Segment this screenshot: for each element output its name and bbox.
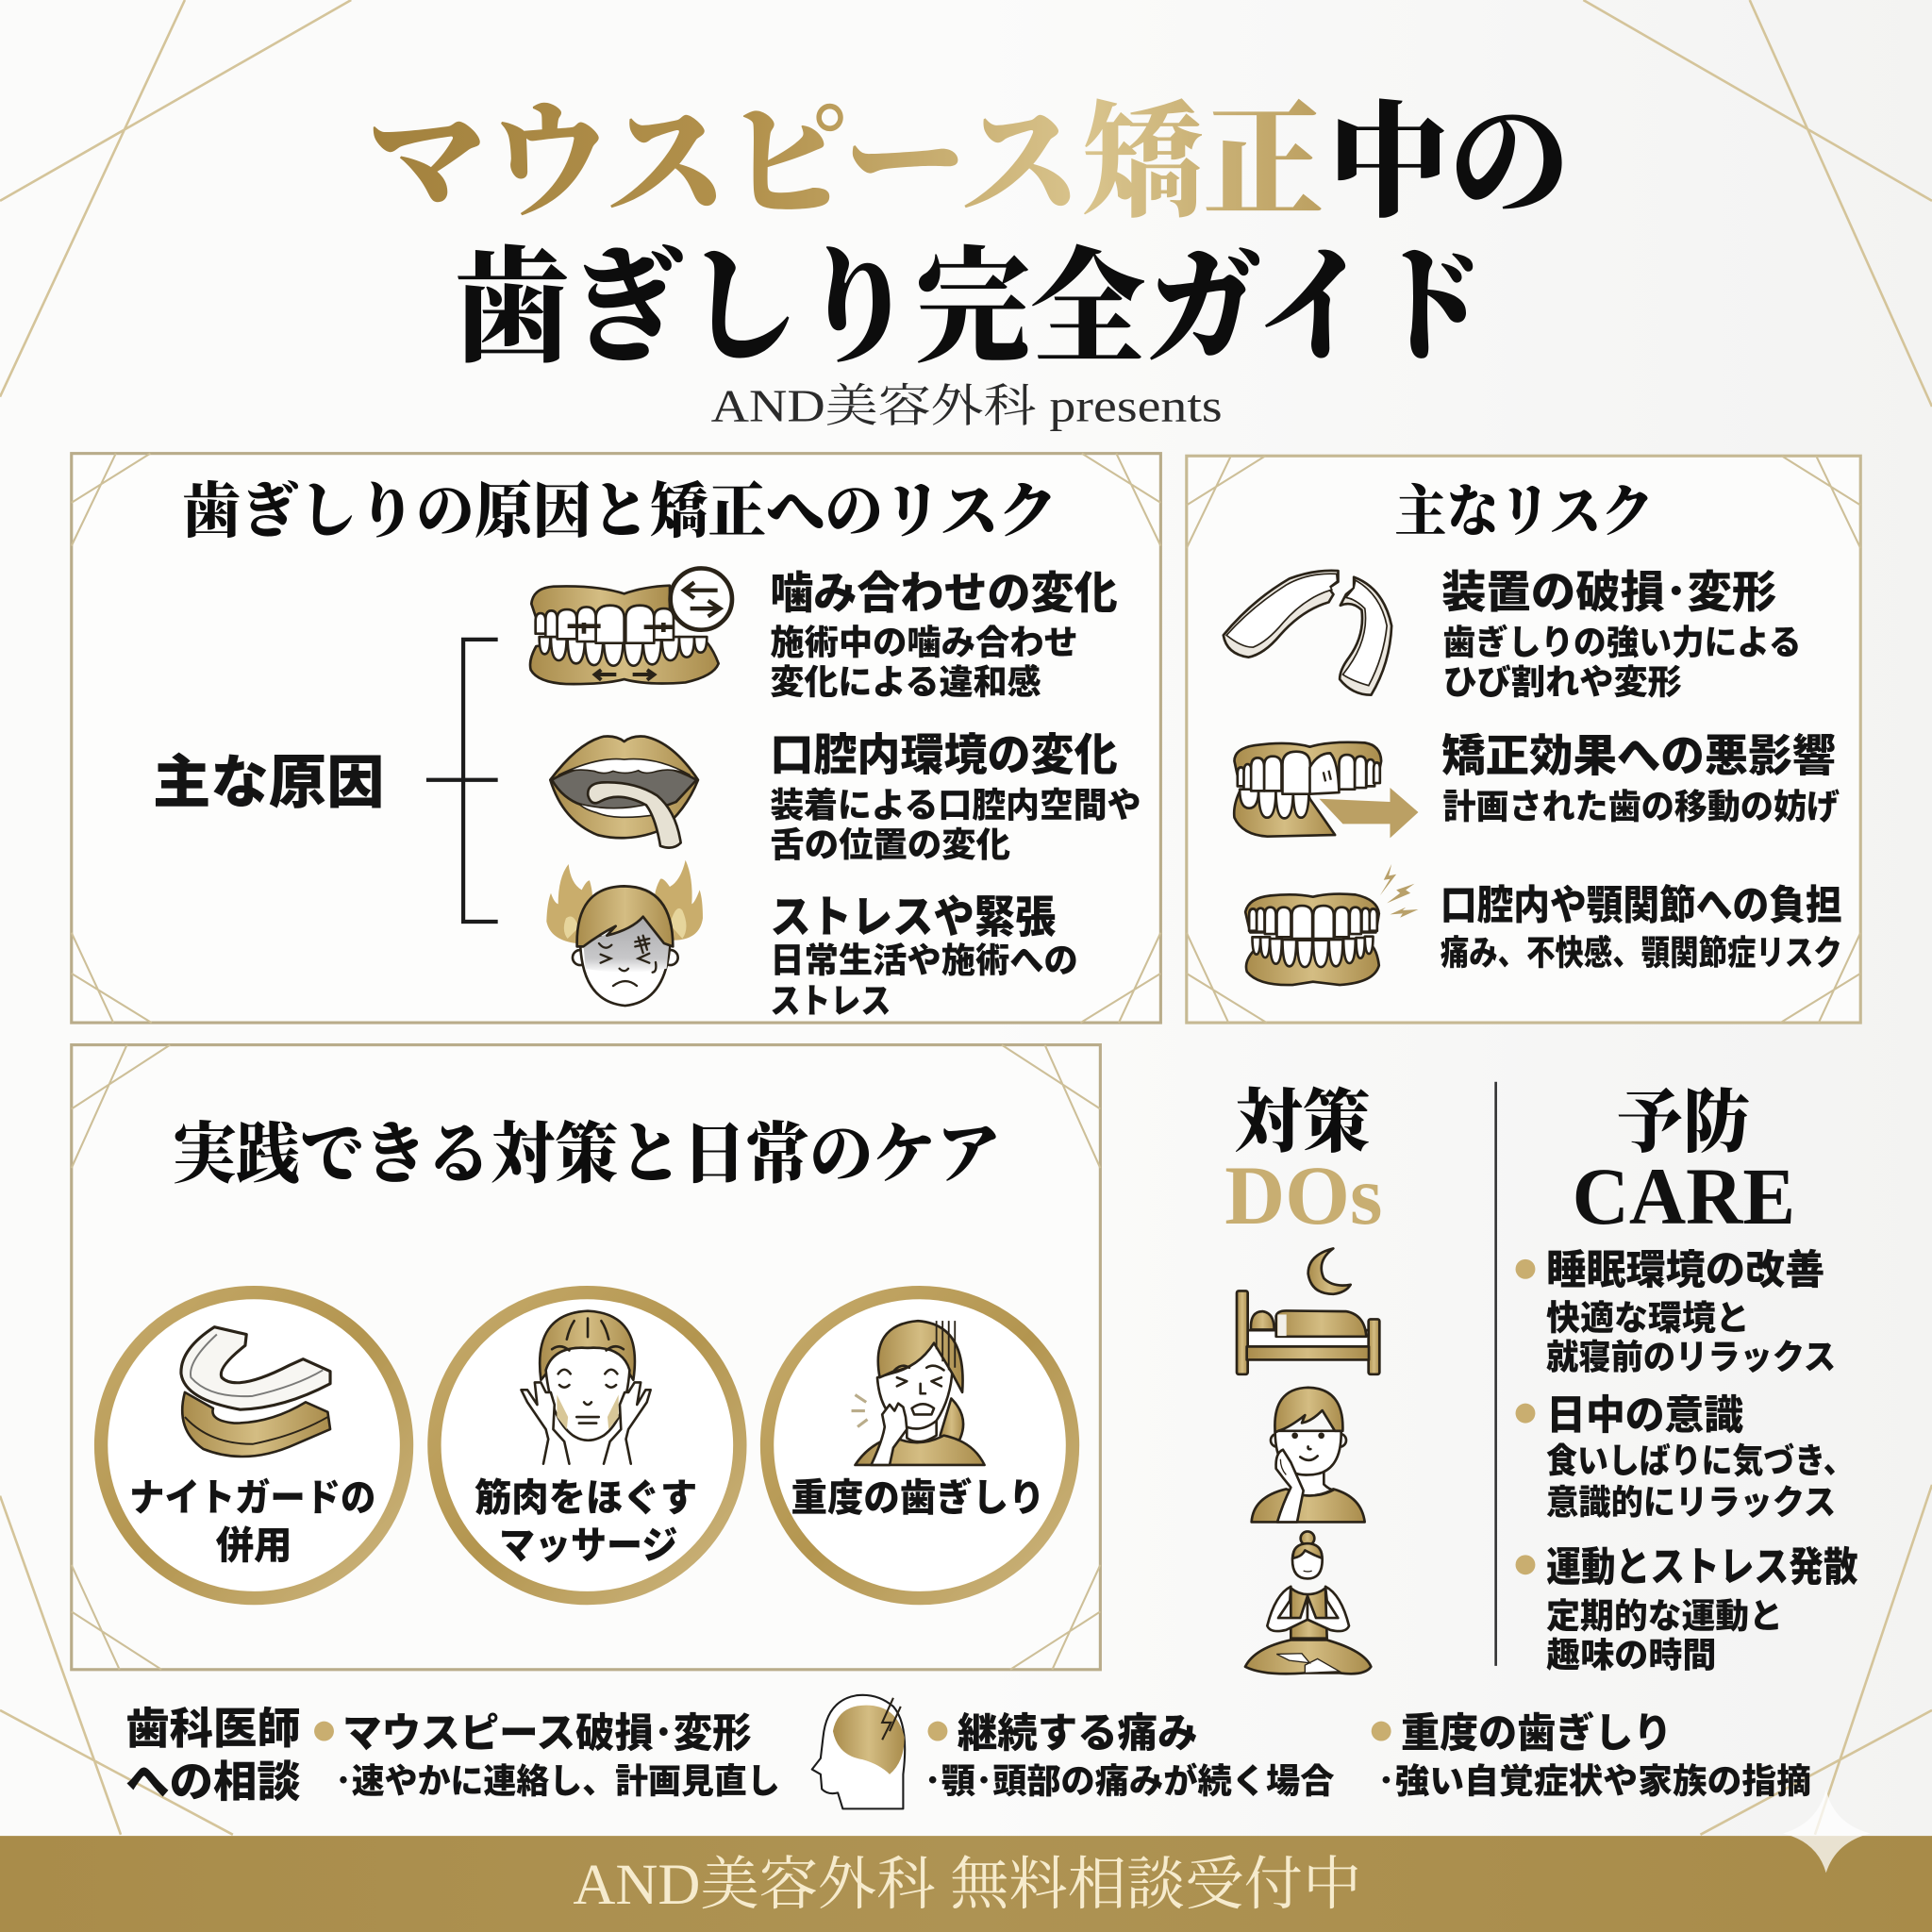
list item: exercise: 趣味の時間	[1546, 1636, 1716, 1674]
divider	[1494, 1082, 1497, 1666]
icon: head with brain pain	[812, 1695, 905, 1808]
icon: worried woman	[852, 1321, 985, 1465]
list item: exercise: 運動とストレス発散	[1546, 1545, 1858, 1591]
label: dentist consultation: 歯科医師	[125, 1705, 301, 1753]
item: damaged mouthpiece: マウスピース破損･変形	[342, 1711, 752, 1757]
panel: causes and risks	[72, 454, 1160, 1023]
footer band	[0, 1836, 1932, 1932]
list item: awareness: 食いしばりに気づき、	[1546, 1441, 1855, 1480]
item: severe bruxism: ･強い自覚症状や家族の指摘	[1377, 1761, 1811, 1800]
icon: sleep	[1237, 1248, 1379, 1374]
label: dentist consultation: への相談	[125, 1757, 301, 1806]
label: severe bruxism: 重度の歯ぎしり	[791, 1475, 1045, 1519]
icon: bite change teeth	[530, 568, 732, 684]
label: night guard	[129, 1475, 375, 1567]
heading: causes: 歯ぎしりの原因と矯正へのリスク	[182, 478, 1058, 545]
icon: face massage	[521, 1311, 651, 1464]
heading: measures: 実践できる対策と日常のケア	[173, 1118, 1001, 1191]
section: consult a dentist	[125, 1695, 1811, 1808]
label: night guard: ナイトガードの	[129, 1475, 375, 1519]
text block: bite change	[770, 568, 1118, 701]
heading: main risks: 主なリスク	[1395, 480, 1654, 543]
heading: CARE: CARE	[1573, 1151, 1795, 1241]
text block: oral environment change: 口腔内環境の変化	[770, 729, 1118, 779]
text block: bite change: 噛み合わせの変化	[770, 568, 1118, 618]
text block: burden on jaw	[1441, 883, 1842, 973]
label: night guard: 併用	[216, 1524, 292, 1567]
item: continuing pain: ･顎･頭部の痛みが続く場合	[924, 1761, 1335, 1800]
heading: DOs: DOs	[1224, 1150, 1382, 1242]
footer text: AND美容外科 無料相談受付中	[573, 1853, 1361, 1917]
heading: CARE	[1573, 1085, 1795, 1241]
text block: effect on treatment	[1441, 731, 1840, 825]
text block: appliance damage: 装置の破損･変形	[1441, 567, 1776, 617]
text block: effect on treatment: 計画された歯の移動の妨げ	[1442, 787, 1840, 825]
title: マウスピース矯正	[366, 93, 1324, 233]
text block: oral environment change	[770, 729, 1141, 864]
text block: appliance damage: 歯ぎしりの強い力による	[1442, 624, 1802, 662]
list item: awareness: 日中の意識	[1546, 1393, 1743, 1439]
text block: burden on jaw: 口腔内や顎関節への負担	[1441, 883, 1842, 928]
icon: teeth with pain bolts	[1245, 864, 1418, 985]
text block: stress: 日常生活や施術への	[770, 941, 1078, 980]
list item: sleep: 快適な環境と	[1546, 1298, 1750, 1337]
text block: bite change: 施術中の噛み合わせ	[770, 624, 1078, 662]
text block: bite change: 変化による違和感	[770, 662, 1041, 701]
text block: stress: ストレス	[770, 982, 891, 1021]
column: DOs	[1224, 1085, 1382, 1674]
heading: CARE: 予防	[1617, 1085, 1750, 1161]
text block: oral environment change: 装着による口腔内空間や	[770, 786, 1141, 824]
icon: sparkle	[1783, 1789, 1871, 1873]
bracket connector	[426, 640, 498, 922]
subtitle: AND美容外科 presents	[711, 382, 1223, 432]
item: continuing pain: 継続する痛み	[958, 1711, 1198, 1757]
label: dentist consultation	[125, 1705, 301, 1806]
icon: stressed face with flames	[546, 860, 703, 1006]
column: CARE	[1516, 1085, 1858, 1674]
text block: oral environment change: 舌の位置の変化	[770, 825, 1010, 864]
icon: teeth with movement arrow	[1234, 742, 1418, 838]
item: severe bruxism: 重度の歯ぎしり	[1401, 1710, 1672, 1757]
title	[366, 93, 1570, 378]
label: massage: 筋肉をほぐす	[475, 1475, 697, 1519]
panel: practical measures	[72, 1045, 1100, 1670]
circle: severe bruxism	[767, 1292, 1073, 1598]
label: massage	[475, 1475, 697, 1567]
list item: sleep: 睡眠環境の改善	[1546, 1248, 1824, 1293]
panel: main risks	[1187, 456, 1860, 1023]
item: severe bruxism	[1372, 1710, 1811, 1800]
circle: night guard	[101, 1292, 407, 1598]
list item: sleep	[1516, 1248, 1836, 1376]
text block: burden on jaw: 痛み、不快感、顎関節症リスク	[1441, 934, 1842, 973]
list item: exercise	[1516, 1545, 1858, 1674]
icon: mouth with appliance	[550, 737, 698, 848]
item: damaged mouthpiece: ･速やかに連絡し、計画見直し	[335, 1761, 780, 1800]
list item: awareness: 意識的にリラックス	[1546, 1483, 1836, 1522]
title: 中の	[1328, 93, 1570, 233]
icon: meditation	[1245, 1531, 1371, 1674]
text block: stress: ストレスや緊張	[770, 892, 1056, 942]
item: continuing pain	[924, 1711, 1335, 1800]
text block: effect on treatment: 矯正効果への悪影響	[1441, 731, 1836, 781]
item: damaged mouthpiece	[314, 1711, 780, 1800]
label: main causes: 主な原因	[153, 750, 385, 815]
heading: DOs: 対策	[1235, 1085, 1370, 1161]
text block: appliance damage: ひび割れや変形	[1442, 662, 1682, 701]
text block: appliance damage	[1441, 567, 1802, 701]
icon: smiling relaxed person	[1252, 1388, 1365, 1522]
icon: broken mouthpiece	[1224, 571, 1391, 695]
icon: night guard	[181, 1327, 330, 1457]
title: 歯ぎしり完全ガイド	[455, 239, 1487, 378]
circle: massage	[434, 1292, 740, 1598]
label: massage: マッサージ	[499, 1524, 677, 1567]
list item: exercise: 定期的な運動と	[1546, 1596, 1783, 1635]
text block: stress	[770, 892, 1078, 1021]
list item: sleep: 就寝前のリラックス	[1546, 1338, 1836, 1376]
list item: awareness	[1516, 1393, 1855, 1522]
heading: DOs	[1224, 1085, 1382, 1242]
